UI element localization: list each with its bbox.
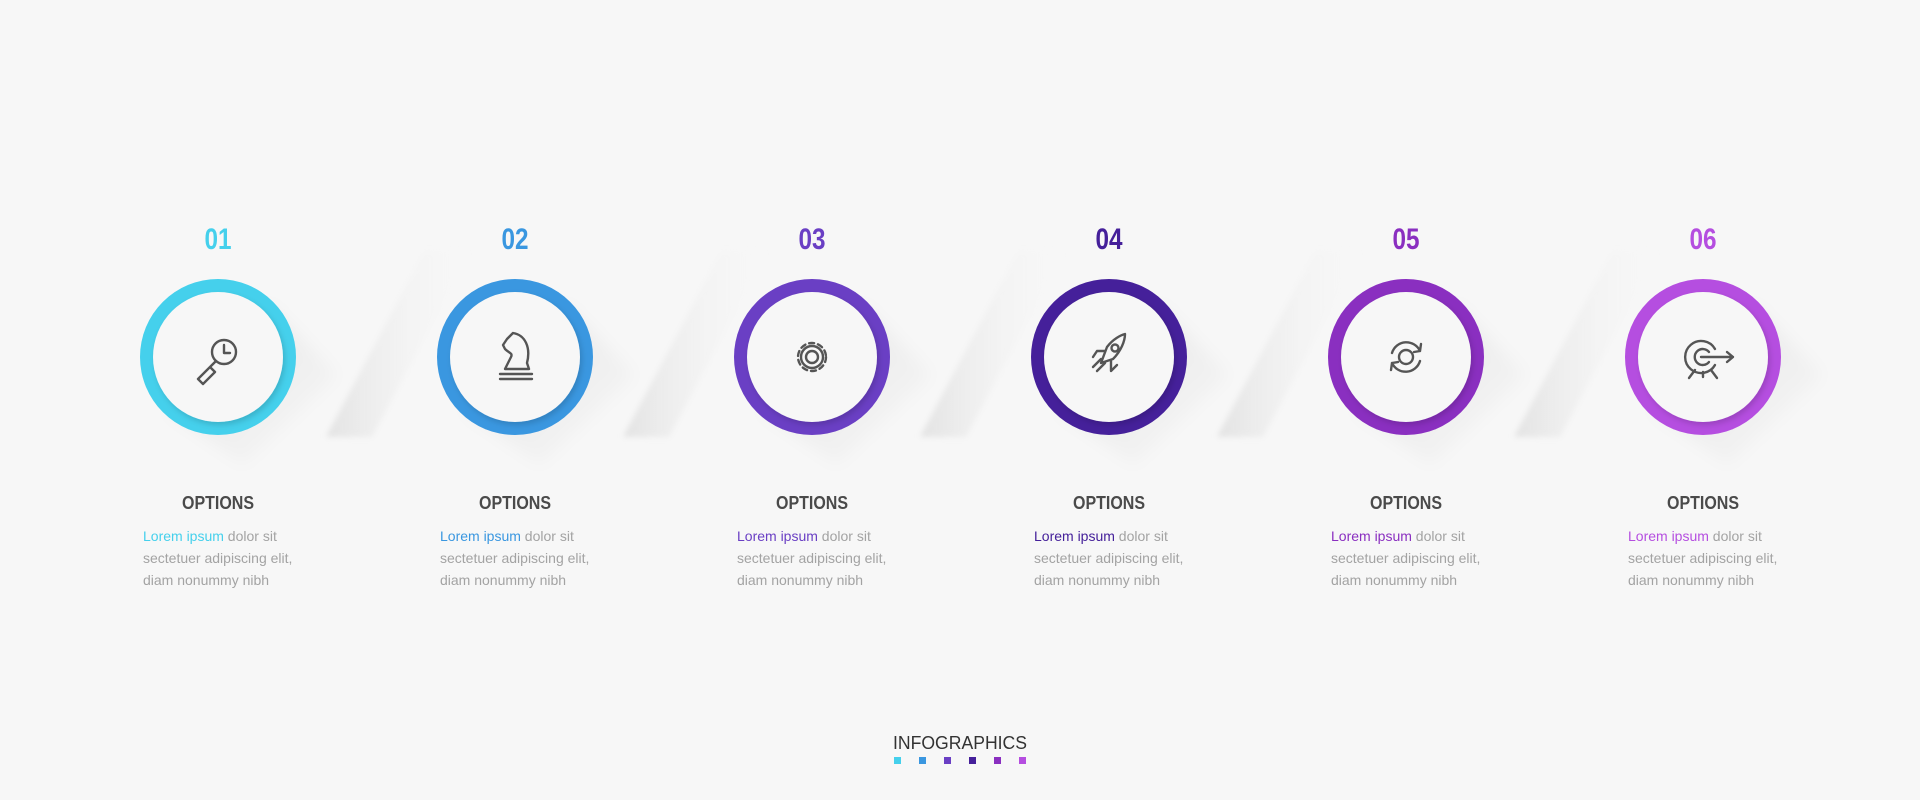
circle 03 — [734, 279, 932, 465]
color squares — [894, 757, 1026, 764]
circle 06 — [1625, 279, 1823, 465]
body text: Lorem ipsum dolor sit — [440, 528, 574, 544]
body text: sectetuer adipiscing elit, — [1628, 550, 1777, 566]
label OPTIONS: OPTIONS — [1073, 493, 1145, 513]
body text: Lorem ipsum dolor sit — [143, 528, 277, 544]
step 04 — [1031, 223, 1229, 588]
circle 01 — [140, 279, 338, 465]
number 04: 04 — [1096, 223, 1123, 256]
body text: sectetuer adipiscing elit, — [737, 550, 886, 566]
number 06: 06 — [1690, 223, 1716, 256]
label OPTIONS: OPTIONS — [479, 493, 551, 513]
number 01: 01 — [204, 223, 232, 256]
body text: Lorem ipsum dolor sit — [1331, 528, 1465, 544]
diagonal shadow 4-5 — [1217, 252, 1361, 437]
circle 05 — [1328, 279, 1526, 465]
body text: diam nonummy nibh — [1034, 572, 1160, 588]
icon: chess knight — [500, 333, 532, 379]
diagonal shadow 1-2 — [326, 252, 470, 437]
number 03: 03 — [798, 223, 826, 256]
step 03 — [734, 223, 932, 588]
body text: sectetuer adipiscing elit, — [1331, 550, 1480, 566]
footer: INFOGRAPHICS: INFOGRAPHICS — [893, 733, 1027, 753]
step 02 — [437, 223, 635, 588]
label OPTIONS: OPTIONS — [776, 493, 848, 513]
label OPTIONS: OPTIONS — [1667, 493, 1739, 513]
body text: Lorem ipsum dolor sit — [1628, 528, 1762, 544]
body text: Lorem ipsum dolor sit — [737, 528, 871, 544]
body text: diam nonummy nibh — [440, 572, 566, 588]
circle 04 — [1031, 279, 1229, 465]
label OPTIONS: OPTIONS — [182, 493, 254, 513]
icon: gear — [798, 343, 826, 371]
body text: sectetuer adipiscing elit, — [1034, 550, 1183, 566]
footer: INFOGRAPHICS — [893, 733, 1027, 764]
diagonal shadow 5-6 — [1514, 252, 1658, 437]
number 02: 02 — [502, 223, 528, 256]
body text: diam nonummy nibh — [143, 572, 269, 588]
body text: sectetuer adipiscing elit, — [440, 550, 589, 566]
label OPTIONS: OPTIONS — [1370, 493, 1442, 513]
icon: rocket — [1093, 334, 1125, 371]
diagonal shadow 2-3 — [623, 252, 767, 437]
body text: diam nonummy nibh — [1628, 572, 1754, 588]
step 06 — [1625, 223, 1823, 588]
body text: diam nonummy nibh — [737, 572, 863, 588]
icon: target — [1685, 341, 1733, 378]
icon: refresh — [1391, 342, 1421, 372]
number 05: 05 — [1392, 223, 1420, 256]
diagonal shadow 3-4 — [920, 252, 1064, 437]
body text: sectetuer adipiscing elit, — [143, 550, 292, 566]
step 01 — [140, 223, 338, 588]
icon: magnifier clock — [198, 340, 236, 384]
body text: Lorem ipsum dolor sit — [1034, 528, 1168, 544]
circle 02 — [437, 279, 635, 465]
body text: diam nonummy nibh — [1331, 572, 1457, 588]
step 05 — [1328, 223, 1526, 588]
